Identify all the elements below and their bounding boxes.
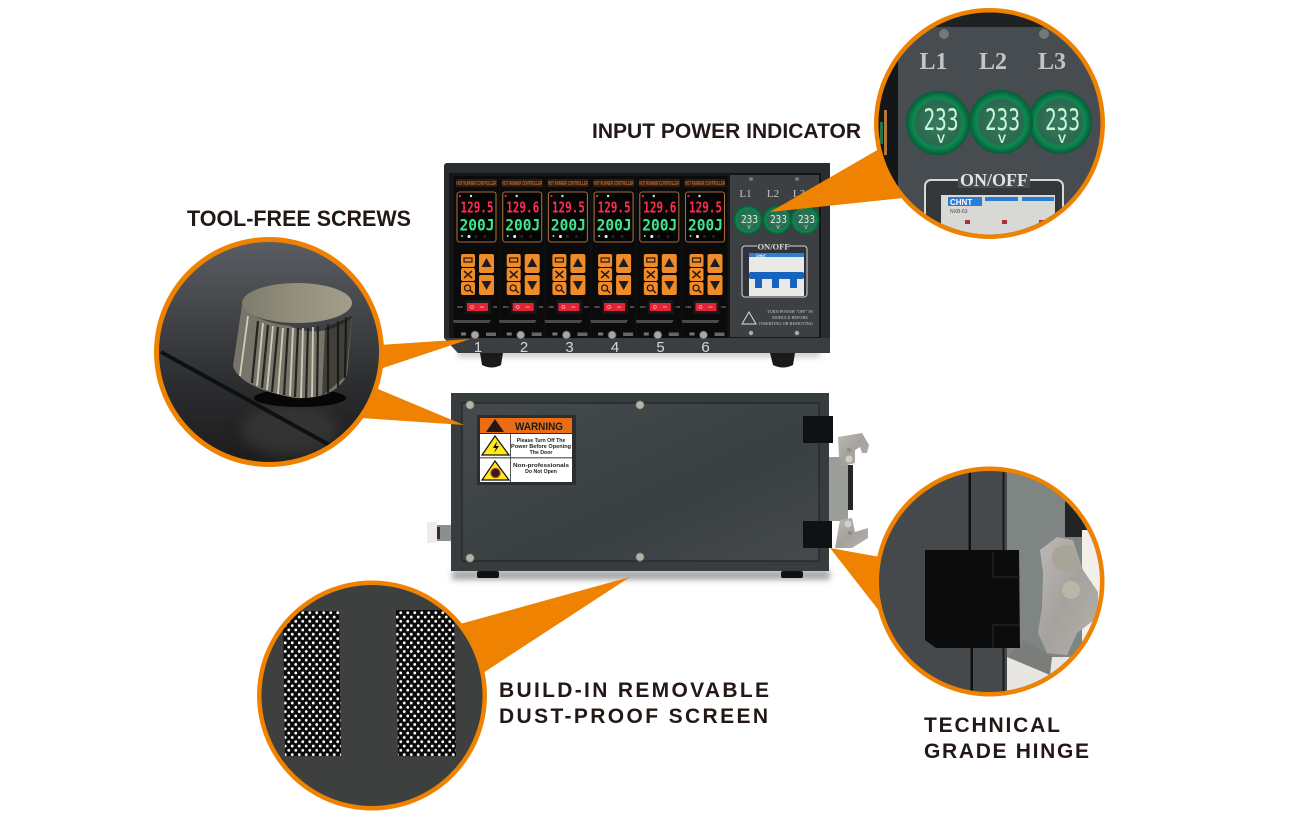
latch: lower	[835, 518, 868, 548]
module 6	[682, 176, 728, 356]
module 4: 129.5	[598, 198, 631, 216]
arrow: hinge pointer	[830, 548, 880, 612]
latch bar	[1007, 640, 1052, 675]
mesh panel left	[283, 611, 341, 756]
mesh panel right	[396, 610, 456, 756]
power panel: TURN POWER "OFF" IN	[767, 309, 813, 314]
module 6: HOT RUNNER CONTROLLER	[685, 181, 725, 187]
latch plate	[1038, 537, 1098, 655]
module 2: 2	[520, 339, 528, 356]
module 2	[499, 176, 545, 356]
power panel: 233	[798, 213, 815, 226]
module 4: ON	[630, 305, 634, 309]
feet	[477, 571, 499, 578]
module 2: OFF	[503, 305, 509, 309]
warning label: Please Turn Off The	[517, 438, 565, 444]
rear connector	[427, 522, 451, 543]
power panel: V	[747, 225, 751, 231]
power panel: L3	[793, 188, 806, 200]
module 4: 4	[611, 339, 619, 356]
module 3	[544, 176, 590, 356]
module 3: 200J	[551, 216, 586, 234]
module 2: HOT RUNNER CONTROLLER	[502, 181, 542, 187]
callout circle: input power indicator: ON/OFF	[960, 170, 1028, 190]
power panel	[730, 175, 820, 337]
foot: left	[480, 353, 503, 368]
module 6: 6	[701, 339, 710, 356]
module 5: 5	[656, 339, 665, 356]
module 3: OFF	[548, 305, 555, 309]
heading: technical grade hinge	[924, 714, 1089, 763]
callout circle: tool-free screw	[154, 237, 385, 468]
power panel: 233	[741, 213, 758, 226]
module 3: HOT RUNNER CONTROLLER	[548, 181, 588, 187]
power panel: 233	[770, 213, 787, 226]
module 4: 200J	[597, 216, 632, 234]
module 4: OFF	[594, 305, 600, 309]
callout circle: input power indicator: 233	[1045, 103, 1080, 137]
module 6: OFF	[686, 305, 692, 309]
module 1: 129.5	[460, 198, 494, 216]
module 5: HOT RUNNER CONTROLLER	[639, 181, 680, 187]
module 1: 200J	[460, 216, 494, 234]
screw cap top	[242, 283, 352, 323]
foot: right	[770, 353, 795, 368]
module 3: ON	[584, 305, 589, 309]
callout circle: input power indicator: L3	[1038, 49, 1066, 75]
heading: dust-proof screen	[499, 679, 769, 728]
callout circle: input power indicator: NXB-63	[950, 209, 968, 215]
callout circle: input power indicator: L1	[919, 49, 948, 75]
heading: input power indicator: INPUT POWER INDICATOR	[592, 119, 861, 143]
warning label: The Door	[530, 450, 552, 456]
module 6: 200J	[688, 216, 723, 234]
module 2: 200J	[505, 216, 540, 234]
module 5: 129.6	[643, 198, 676, 216]
callout circle: dust-proof screen	[257, 580, 487, 810]
warning label: WARNING	[515, 421, 563, 433]
module 3: 3	[565, 339, 574, 356]
module 4: HOT RUNNER CONTROLLER	[594, 181, 634, 187]
warning label: Non-professionals	[513, 463, 569, 469]
callout circle: technical grade hinge	[874, 466, 1110, 700]
callout circle: input power indicator: V	[1058, 132, 1066, 146]
callout circle: input power indicator: V	[937, 132, 945, 146]
arrow: tool-free screw pointer, front	[380, 339, 470, 369]
warning label: Do Not Open	[525, 469, 557, 475]
door screws	[466, 401, 644, 562]
warning label: Power Before Opening	[511, 444, 571, 450]
photo: controller back door	[427, 393, 869, 580]
screw knurled body	[233, 305, 352, 398]
module 5: 200J	[642, 216, 677, 234]
callout circle: input power indicator: 233	[985, 103, 1020, 137]
heading: dust-proof screen: BUILD-IN REMOVABLE	[499, 679, 769, 702]
module 1: ON	[493, 305, 497, 309]
module 2: 129.6	[506, 198, 539, 216]
module 1: OFF	[457, 305, 463, 309]
module 2: ON	[538, 305, 543, 309]
power panel: MODULE BEFORE	[772, 315, 808, 320]
photo: hot runner controller front	[444, 163, 830, 368]
module 5: ON	[676, 305, 680, 309]
power panel: ON/OFF	[757, 242, 790, 252]
heading: technical grade hinge: TECHNICAL	[924, 714, 1060, 737]
side plate	[829, 457, 848, 521]
arrow: dust screen pointer	[460, 577, 630, 673]
warning label	[477, 415, 576, 485]
module 3: 129.5	[552, 198, 585, 216]
power panel: V	[776, 225, 780, 231]
heading: dust-proof screen: DUST-PROOF SCREEN	[499, 705, 768, 728]
door body	[451, 393, 829, 571]
arrow: input power indicator pointer	[770, 145, 903, 212]
power panel: CHNT	[756, 254, 767, 258]
callout circle: input power indicator: L2	[979, 49, 1007, 75]
power panel: L2	[767, 188, 779, 200]
module 1: 1	[474, 339, 482, 356]
callout circle: input power indicator: CHNT	[950, 198, 972, 207]
heading: technical grade hinge: GRADE HINGE	[924, 740, 1089, 763]
power panel: INSERTING OR REMOVING	[759, 321, 813, 326]
power panel: L1	[739, 188, 752, 200]
module 5	[636, 176, 682, 356]
hinge block	[925, 550, 1020, 648]
module 5: OFF	[640, 305, 646, 309]
module 4	[590, 176, 636, 356]
latch: upper	[838, 433, 869, 466]
arrow: tool-free screw pointer, back	[361, 389, 464, 425]
callout circle: input power indicator	[874, 8, 1106, 250]
hinge: lower	[803, 521, 832, 548]
chassis	[444, 163, 830, 353]
callout circle: input power indicator: 233	[924, 103, 958, 137]
hinge: upper	[803, 416, 833, 443]
callout circle: input power indicator: V	[998, 132, 1006, 146]
heading: tool-free screws: TOOL-FREE SCREWS	[187, 206, 411, 231]
module 1	[453, 176, 499, 356]
power panel: V	[804, 225, 808, 231]
module 6: ON	[721, 305, 726, 309]
module 1: HOT RUNNER CONTROLLER	[456, 181, 497, 187]
module 6: 129.5	[689, 198, 722, 216]
